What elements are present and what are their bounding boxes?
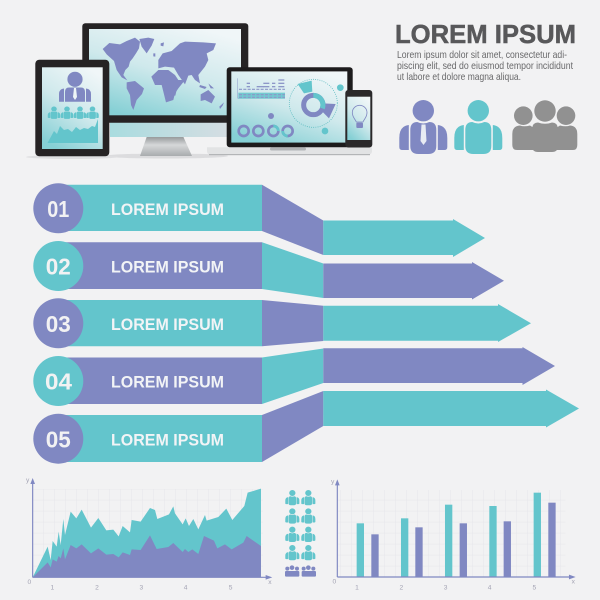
axis labels: x <box>572 578 576 585</box>
icon: group <box>512 100 577 152</box>
axis labels: 3 <box>444 584 448 591</box>
arrow 3 <box>323 304 531 342</box>
arrow 4 <box>323 347 555 385</box>
ribbon 04: LOREM IPSUM <box>111 373 224 392</box>
axes <box>335 479 576 579</box>
axis labels: x <box>268 579 272 586</box>
ribbon 01 <box>33 183 323 255</box>
number 02: 02 <box>46 254 71 280</box>
axis labels: 1 <box>355 584 359 591</box>
teal bars <box>357 493 541 577</box>
number 04: 04 <box>45 369 72 395</box>
ribbon 03: LOREM IPSUM <box>111 315 224 334</box>
mini radial chart <box>268 79 344 134</box>
teal area series <box>33 489 261 577</box>
axis labels: 4 <box>488 584 492 591</box>
axis labels: 5 <box>532 584 536 591</box>
mini bar grid <box>238 78 285 99</box>
axis labels: 0 <box>332 578 336 585</box>
number 01: 01 <box>47 196 69 222</box>
number 05: 05 <box>46 426 71 452</box>
ribbon 01: LOREM IPSUM <box>111 200 224 219</box>
ribbon 05 <box>33 391 323 464</box>
mini area chart <box>48 119 98 143</box>
text block: intro <box>397 49 573 83</box>
icon: person <box>454 100 502 154</box>
purple area series <box>33 535 261 577</box>
purple bars <box>371 503 556 577</box>
area chart <box>26 477 272 592</box>
device: desktop monitor with world map <box>82 23 248 158</box>
arrow 2 <box>323 262 504 300</box>
axis labels: 2 <box>95 585 99 592</box>
icon: manager <box>59 72 91 102</box>
axis labels: 2 <box>399 584 403 591</box>
device: phone with bulb <box>345 90 372 148</box>
arrow 5 <box>323 390 579 428</box>
axis labels: 4 <box>184 585 188 592</box>
number 04 <box>33 356 83 406</box>
ribbon 04 <box>33 348 323 406</box>
axis labels: y <box>26 477 30 484</box>
axis labels: y <box>331 478 335 485</box>
device: laptop <box>207 67 372 155</box>
text block: intro: Lorem ipsum dolor sit amet, consectetur adi- <box>397 49 567 61</box>
ribbon 03 <box>33 298 323 348</box>
bar chart <box>331 478 576 591</box>
device: tablet <box>26 60 118 159</box>
ribbon 02 <box>33 241 323 298</box>
axis labels <box>26 477 272 592</box>
number 02 <box>33 241 83 291</box>
number 03: 03 <box>46 311 71 337</box>
axis labels: 3 <box>139 585 143 592</box>
axis labels: 1 <box>50 585 54 592</box>
title: LOREM IPSUM <box>395 19 576 49</box>
axes <box>30 478 272 580</box>
number 03 <box>33 298 83 348</box>
mini donuts <box>239 126 293 136</box>
ribbon 05: LOREM IPSUM <box>111 430 224 449</box>
ribbon 02: LOREM IPSUM <box>111 258 224 277</box>
axis labels <box>331 478 576 591</box>
icon: team row <box>48 106 99 119</box>
axis labels: 0 <box>27 579 31 586</box>
icon grid: people <box>285 490 316 577</box>
world map <box>103 38 224 110</box>
icon: light bulb <box>352 105 367 128</box>
number 05 <box>33 414 83 464</box>
axis labels: 5 <box>229 585 233 592</box>
icon: businessman <box>399 100 447 154</box>
text block: intro: ut labore et dolore magna aliqua. <box>397 71 521 83</box>
arrow 1 <box>323 219 485 257</box>
number 01 <box>33 183 83 233</box>
